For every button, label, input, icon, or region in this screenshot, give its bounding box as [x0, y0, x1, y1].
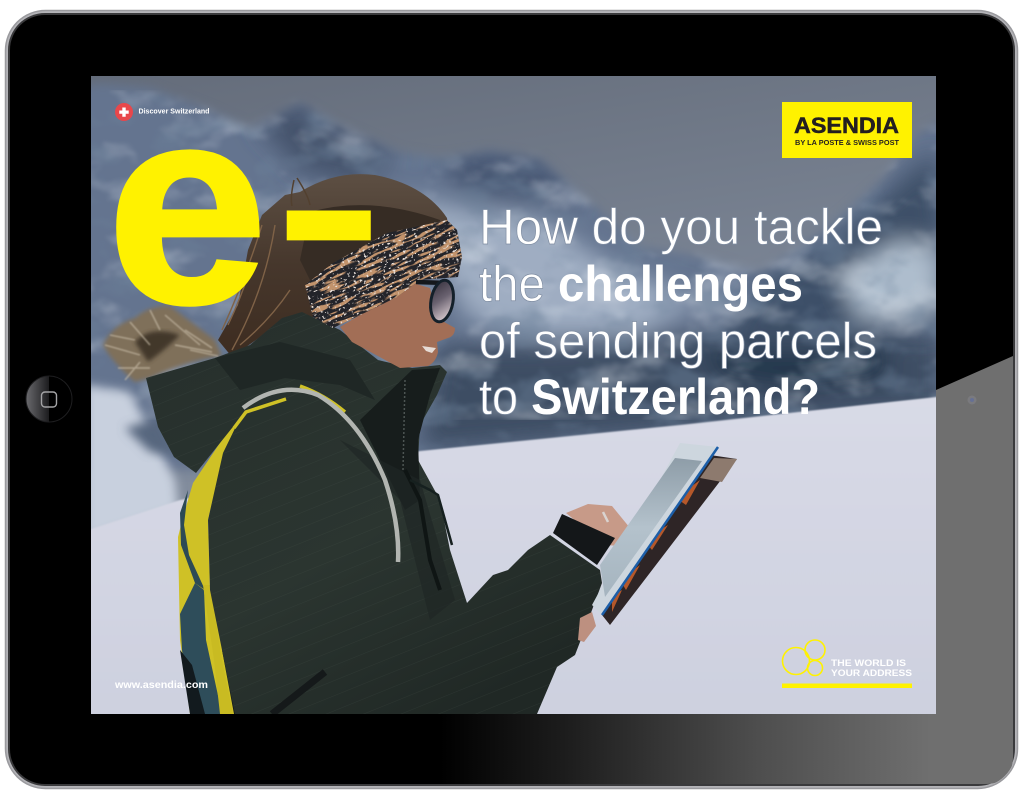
hydration tube: [243, 390, 398, 562]
mouth: [422, 346, 436, 353]
hair: [218, 174, 450, 357]
glass reflection: [440, 356, 1013, 784]
headline: [479, 199, 883, 425]
camera dot: [968, 396, 976, 404]
big title mark e-: e: [107, 50, 267, 362]
backpack: [178, 427, 235, 714]
panel: screen: [91, 76, 936, 714]
yellow shoulder strap edges: [234, 386, 345, 428]
face: [340, 283, 455, 368]
logo: Asendia: [782, 102, 912, 158]
logo: Asendia: BY LA POSTE & SWISS POST: [795, 138, 899, 147]
home button: [26, 376, 72, 422]
fur hood trim: [103, 306, 222, 382]
headline: the challenges: [479, 256, 803, 312]
photo: snowfield: [85, 396, 945, 720]
tagline: The world is your address: [782, 640, 912, 688]
website url: www.asendia.com: [114, 679, 208, 691]
logo: Asendia: ASENDIA: [794, 113, 899, 138]
big title mark e-: [116, 149, 371, 307]
headband: [305, 220, 462, 328]
badge: Swiss flag and Discover Switzerland: [115, 103, 210, 121]
tagline: The world is your address: THE WORLD IS: [831, 658, 906, 669]
tagline: The world is your address: YOUR ADDRESS: [831, 668, 912, 679]
big title mark e-: -: [274, 64, 384, 344]
tablet held by woman: [592, 443, 737, 625]
headline: to Switzerland?: [479, 369, 820, 425]
jacket: [146, 312, 602, 714]
headline: How do you tackle: [479, 199, 883, 255]
hand and cuff: [553, 504, 632, 642]
photo: woman: [103, 157, 737, 714]
photo: mountain background: [91, 76, 936, 530]
sunglasses: [416, 278, 456, 324]
badge: Swiss flag and Discover Switzerland: Discover Switzerland: [138, 106, 210, 116]
headline: of sending parcels: [479, 313, 877, 369]
